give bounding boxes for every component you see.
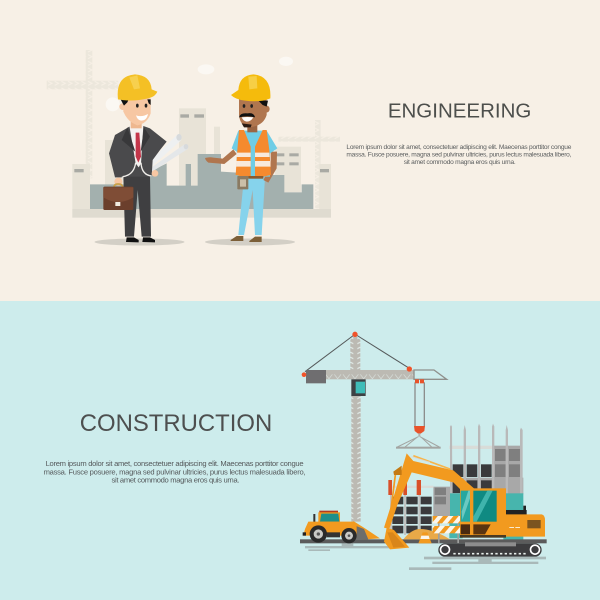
background city skyline bbox=[47, 50, 340, 218]
text block: construction description: sit amet commodo magna eros quis urna. bbox=[112, 476, 240, 485]
panel: construction background bbox=[0, 301, 600, 600]
text block: construction description: Lorem ipsum dolor sit amet, consectetuer adipiscing elit. Maecenas porttitor congue bbox=[46, 459, 304, 468]
vehicle: wheel loader bbox=[303, 511, 380, 543]
shadow under engineer bbox=[94, 238, 184, 246]
vehicle: excavator bbox=[384, 453, 545, 557]
heading: CONSTRUCTION: CONSTRUCTION bbox=[80, 410, 272, 437]
heading: ENGINEERING: ENGINEERING bbox=[388, 100, 531, 122]
ground and shadows bbox=[300, 539, 547, 570]
illustration: building under construction bbox=[388, 424, 523, 540]
figure: engineer in suit bbox=[103, 74, 188, 242]
text block: engineering description: sit amet commodo magna eros quis urna. bbox=[404, 159, 516, 166]
figure: worker in safety vest bbox=[205, 74, 277, 242]
illustration: tower crane bbox=[302, 332, 447, 522]
text block: engineering description: massa. Fusce posuere, magna sed pulvinar ultricies, purus lectus malesuada libero, bbox=[346, 152, 572, 158]
shadow under worker bbox=[205, 238, 295, 246]
panel: engineering background bbox=[0, 0, 600, 301]
sand pile, cone and barricade bbox=[403, 515, 460, 543]
text block: construction description: massa. Fusce posuere, magna sed pulvinar ultricies, purus lectus malesuada libero, bbox=[44, 467, 306, 476]
text block: engineering description: Lorem ipsum dolor sit amet, consectetuer adipiscing elit. Maecenas porttitor congue bbox=[346, 144, 572, 151]
